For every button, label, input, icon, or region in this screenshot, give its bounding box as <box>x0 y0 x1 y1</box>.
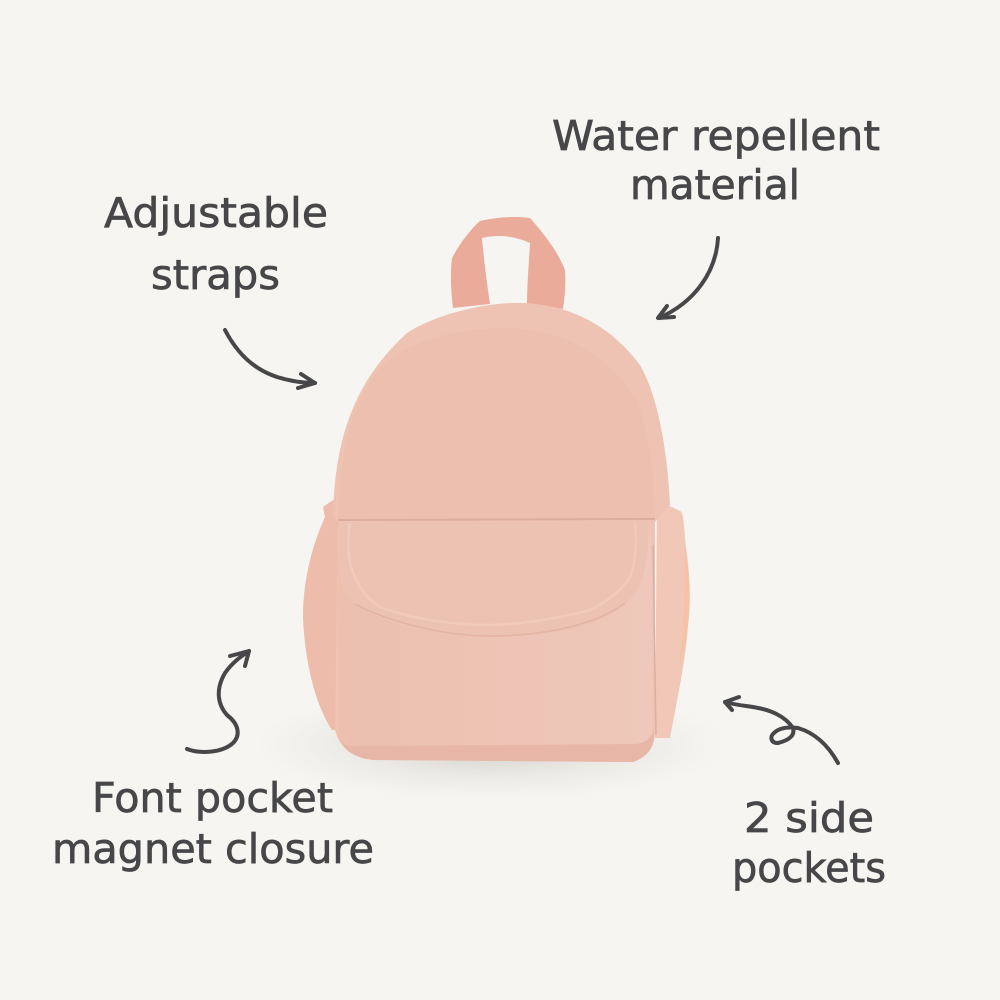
label: 2 side pockets <box>732 794 886 892</box>
label: adjustable straps: Adjustable <box>104 189 328 237</box>
handle <box>451 217 565 309</box>
front upper panel <box>338 328 655 520</box>
arrow: side pockets <box>725 697 838 763</box>
label: 2 side pockets: 2 side <box>744 794 874 842</box>
arrow: front pocket <box>187 651 249 752</box>
flap shading edge <box>355 603 625 636</box>
front panel seam <box>338 519 655 520</box>
right side pocket <box>655 500 690 738</box>
left side pocket <box>303 500 342 730</box>
label: front pocket magnet closure: magnet closure <box>52 825 374 873</box>
floor shadow <box>255 690 725 800</box>
main body rim <box>333 303 670 762</box>
label: water repellent material: Water repellent <box>552 112 880 160</box>
label: front pocket magnet closure <box>52 774 374 873</box>
arrow: water repellent <box>658 238 718 318</box>
bottom panel <box>336 728 654 762</box>
pocket flap <box>338 522 648 636</box>
right seam <box>653 545 656 735</box>
label: adjustable straps: straps <box>151 251 280 299</box>
label: water repellent material <box>552 112 880 209</box>
front lower panel <box>338 522 653 747</box>
right pocket edge <box>679 545 690 668</box>
label: adjustable straps <box>104 189 328 299</box>
flap stitching <box>348 523 636 625</box>
arrow: adjustable straps <box>225 330 315 388</box>
label: water repellent material: material <box>630 161 800 209</box>
backpack <box>303 217 690 762</box>
label: 2 side pockets: pockets <box>732 844 886 892</box>
label: front pocket magnet closure: Font pocket <box>92 774 333 822</box>
